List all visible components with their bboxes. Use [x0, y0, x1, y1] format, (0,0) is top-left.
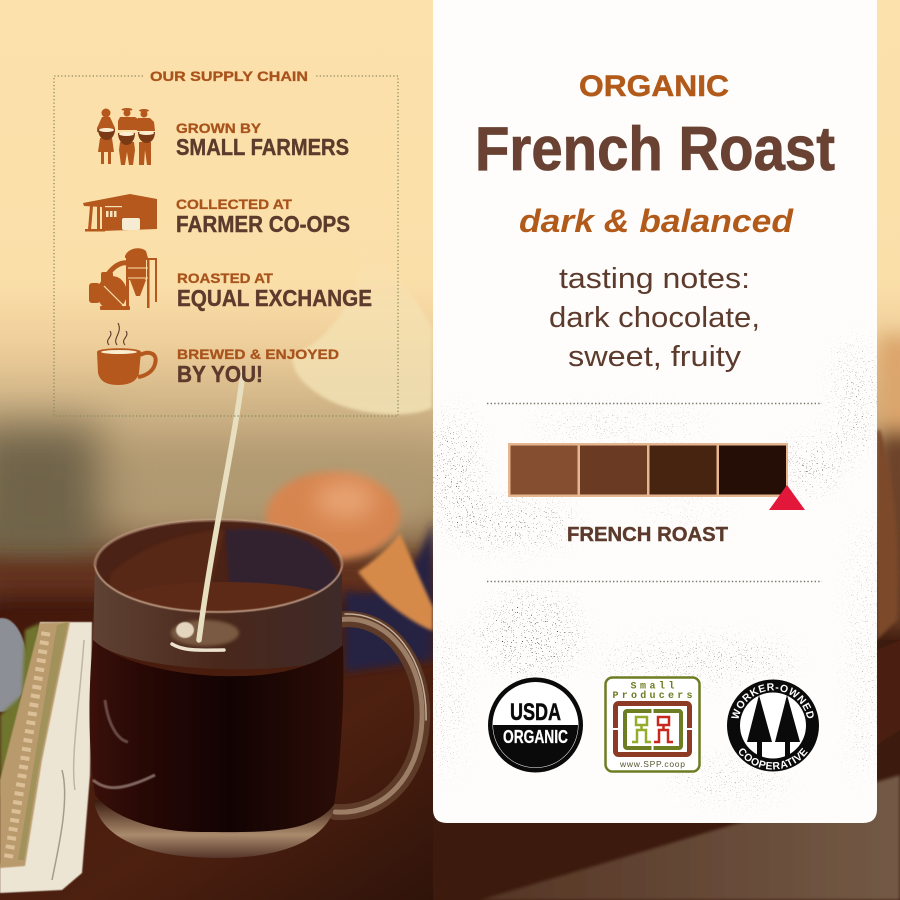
- step text: brewed and enjoyed by you: BY YOU!: [177, 361, 263, 387]
- badge: worker-owned cooperative: [727, 680, 819, 772]
- step text: collected at farmer co-ops: COLLECTED AT: [176, 196, 292, 212]
- eyebrow: organic: ORGANIC: [579, 70, 729, 103]
- step text: roasted at equal exchange: ROASTED AT: [177, 270, 273, 286]
- icon: three farmers with baskets: [97, 108, 155, 165]
- badge: small producers: [606, 678, 700, 772]
- icon: roasting machine: [89, 248, 157, 310]
- subtitle: dark and balanced: dark & balanced: [519, 203, 795, 239]
- step text: collected at farmer co-ops: [176, 196, 350, 237]
- blue plate: [345, 520, 433, 672]
- badge: worker-owned cooperative: COOPERATIVE: [738, 748, 808, 770]
- roast scale bar: [508, 443, 788, 497]
- badge: USDA organic: USDA: [510, 699, 561, 726]
- roast label: FRENCH ROAST: [567, 524, 728, 546]
- panel: product card: [433, 0, 877, 823]
- tasting notes: tasting notes:: [559, 263, 750, 295]
- tasting notes: dark chocolate,: [549, 302, 760, 334]
- icon: steaming coffee cup: [97, 323, 156, 385]
- milk stream: [199, 372, 243, 640]
- step text: collected at farmer co-ops: FARMER CO-OPS: [176, 211, 350, 237]
- tasting notes: sweet, fruity: [568, 341, 742, 373]
- badge: small producers: Small: [630, 680, 674, 692]
- supply chain heading: OUR SUPPLY CHAIN: [150, 68, 308, 84]
- step text: grown by small farmers: [176, 120, 349, 160]
- icon: co-op warehouse: [83, 194, 157, 232]
- badge: USDA organic: ORGANIC: [503, 727, 568, 747]
- glass mug of coffee: [89, 520, 426, 858]
- badge: small producers: www.SPP.coop: [619, 759, 685, 769]
- badge: USDA organic: [488, 678, 583, 772]
- step text: brewed and enjoyed by you: BREWED & ENJOYED: [177, 346, 339, 362]
- step text: roasted at equal exchange: [177, 270, 372, 311]
- badge: worker-owned cooperative: WORKER-OWNED: [731, 683, 814, 718]
- tasting notes: [549, 263, 760, 373]
- napkin: [0, 622, 92, 893]
- spoon: [0, 618, 27, 712]
- panel: supply chain: [54, 68, 398, 416]
- step text: grown by small farmers: SMALL FARMERS: [176, 134, 349, 160]
- roast indicator triangle: [769, 485, 805, 510]
- pitcher of milk: [292, 240, 432, 414]
- tangerine and peel: [266, 472, 433, 631]
- step text: brewed and enjoyed by you: [177, 346, 339, 387]
- step text: roasted at equal exchange: EQUAL EXCHANGE: [177, 285, 372, 311]
- step text: grown by small farmers: GROWN BY: [176, 120, 262, 136]
- badge: small producers: Producers: [612, 690, 692, 702]
- title: French Roast: French Roast: [475, 115, 835, 184]
